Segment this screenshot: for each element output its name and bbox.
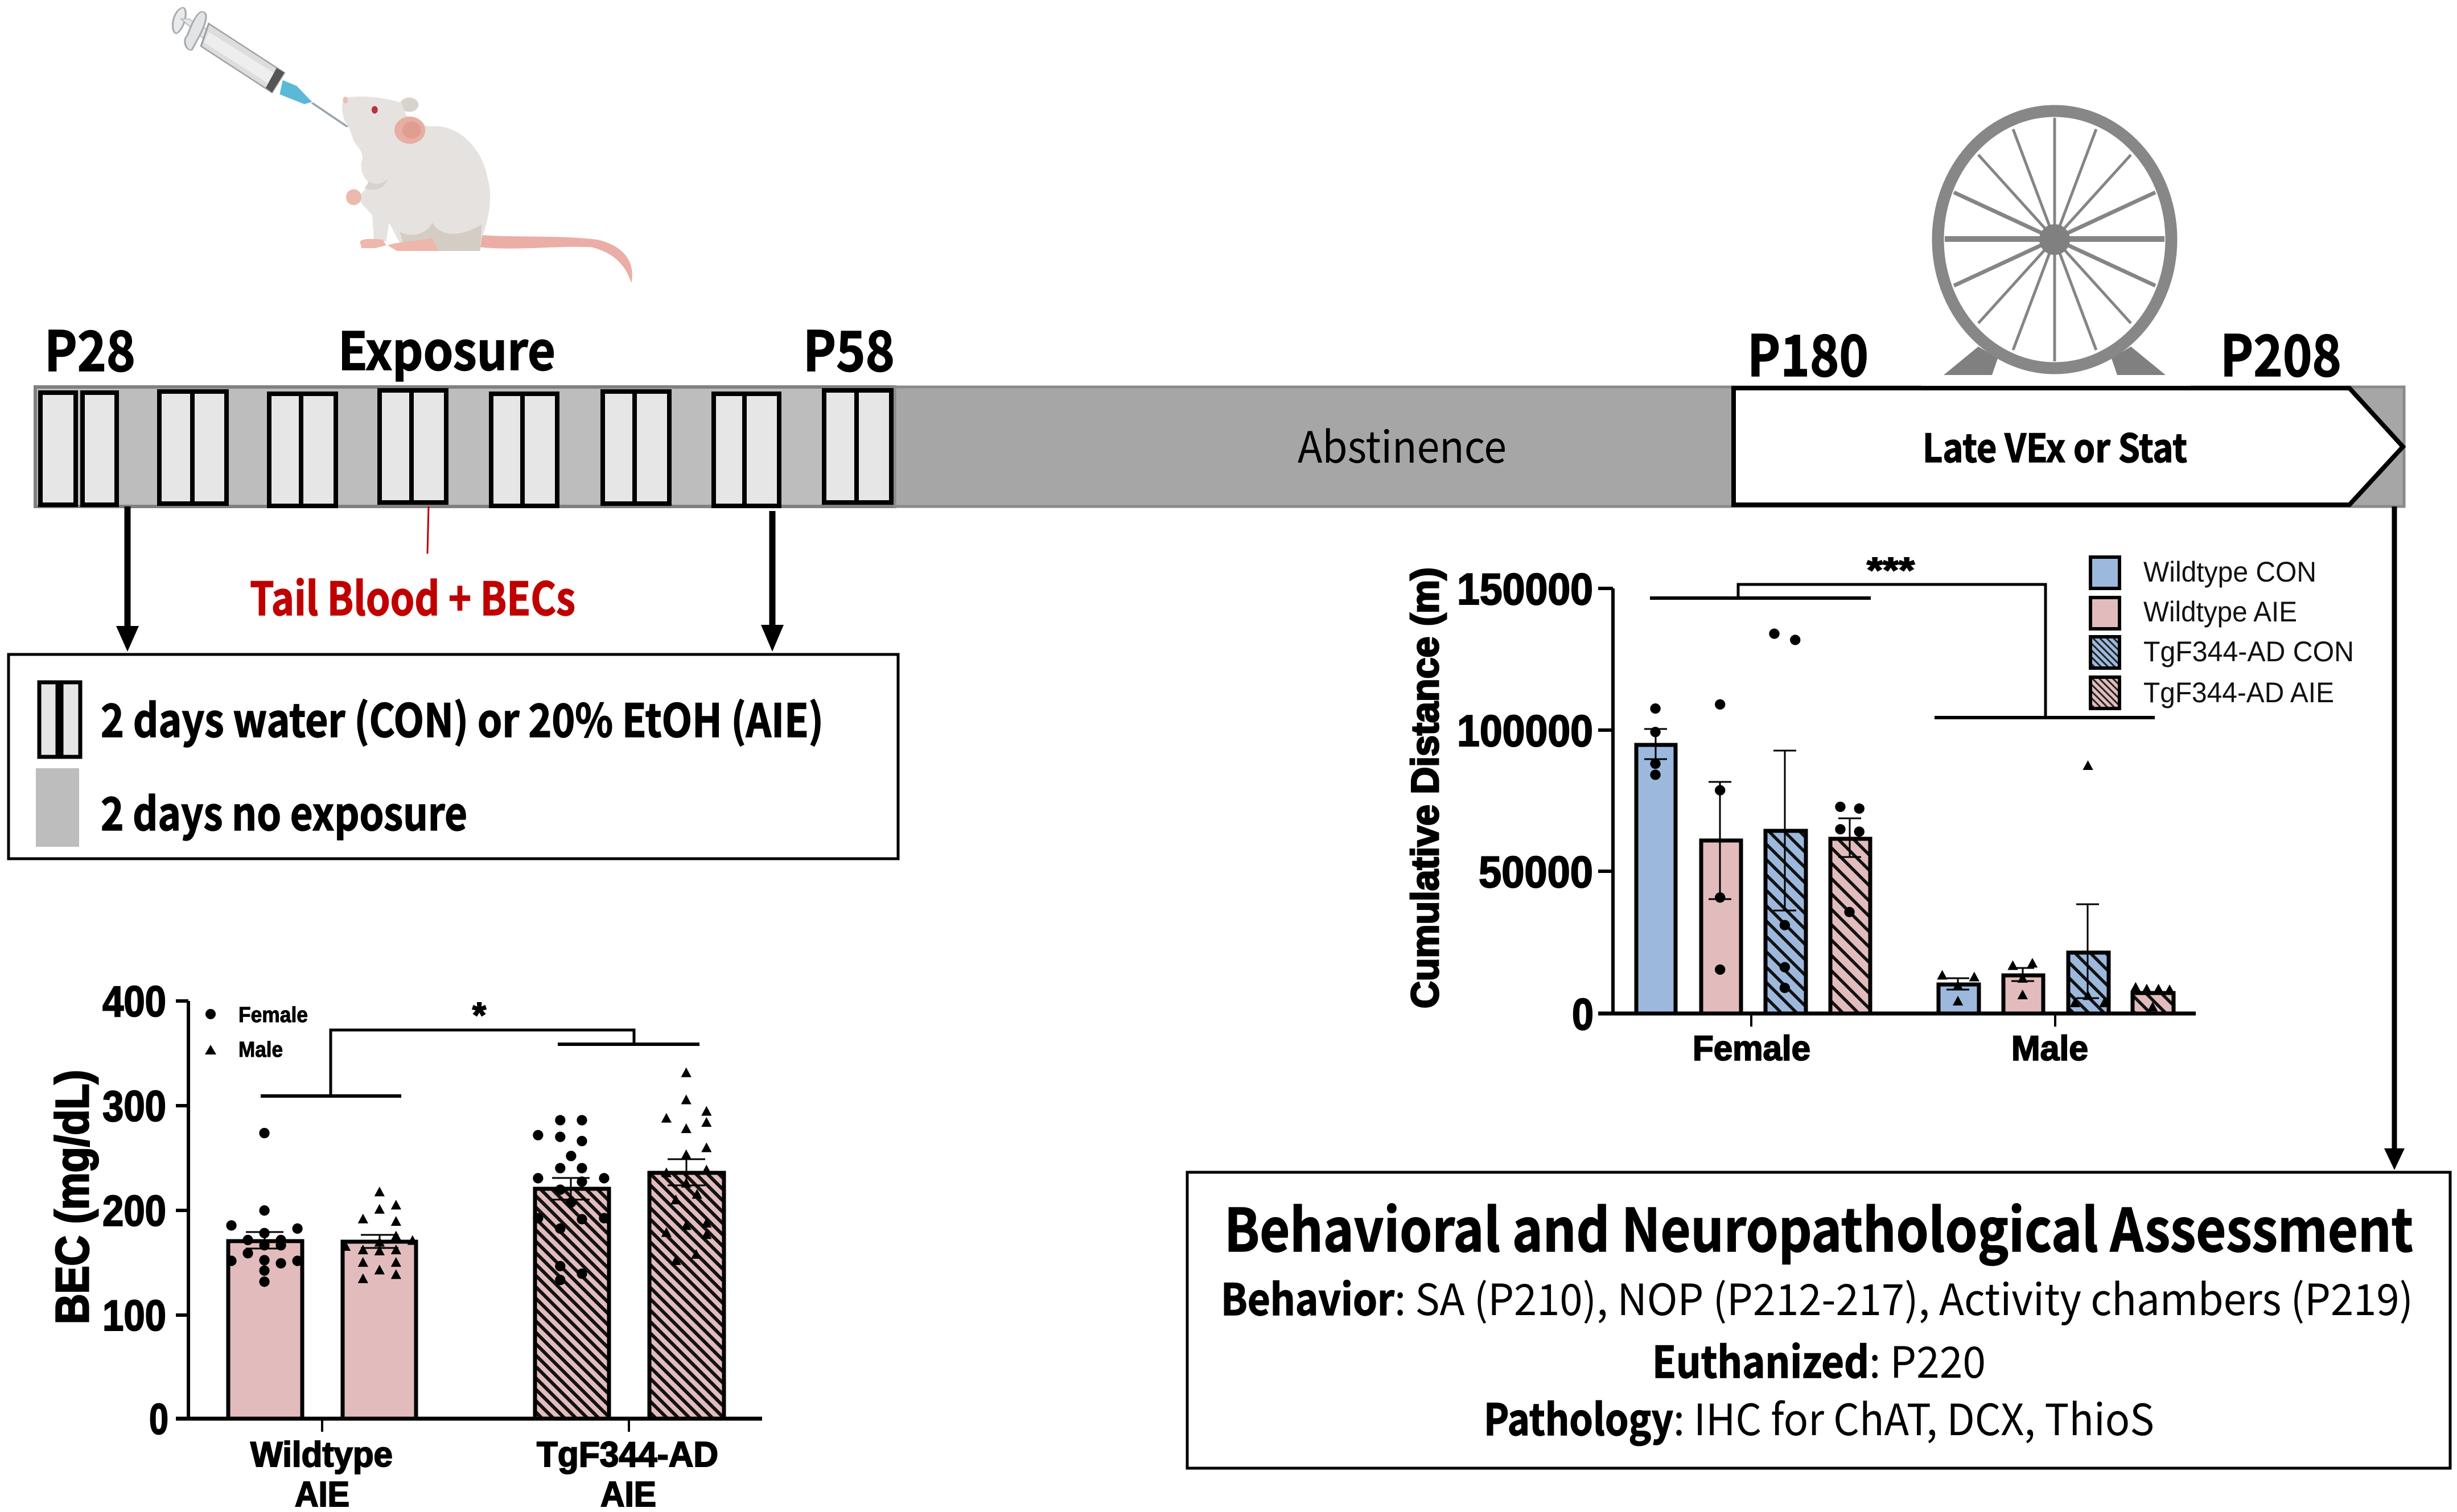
y tick labels: 0 xyxy=(149,1395,168,1444)
euthanized line: : P220 xyxy=(1869,1328,1986,1390)
text: exposure days: 2 days water (CON) or 20% EtOH (AIE) xyxy=(101,685,824,751)
y tick labels: 150000 xyxy=(1457,564,1593,614)
paw xyxy=(346,189,361,205)
behavior line: Behavior xyxy=(1221,1265,1395,1328)
exposure segment xyxy=(35,387,895,506)
x axis labels: Male xyxy=(2011,1029,2088,1068)
y axis title: Cumulative Distance (m) xyxy=(1404,567,1447,1008)
tail blood marker line xyxy=(427,506,429,554)
arrow: timeline to assessment xyxy=(2384,506,2405,1170)
body shading xyxy=(400,223,481,251)
x axis labels: Wildtype xyxy=(250,1435,393,1474)
pathology line: : IHC for ChAT, DCX, ThioS xyxy=(1673,1385,2154,1448)
euthanized line: Euthanized xyxy=(1652,1328,1869,1390)
pink ear xyxy=(394,117,425,144)
exposure day pairs xyxy=(40,390,891,506)
significance bracket: * xyxy=(472,996,487,1035)
panel: behavioral and neuropathological assessment xyxy=(1187,1172,2450,1468)
chart: BEC xyxy=(47,978,762,1512)
nose xyxy=(343,97,348,104)
data points xyxy=(226,1068,711,1287)
chart legend: Wildtype CON xyxy=(2143,556,2316,588)
axes xyxy=(1598,588,2196,1027)
y tick labels xyxy=(102,978,168,1444)
chart legend: TgF344-AD CON xyxy=(2143,636,2354,668)
chart: cumulative distance xyxy=(1404,551,2354,1068)
label: P58: P58 xyxy=(803,307,895,387)
sex legend: Female xyxy=(238,1003,308,1027)
y tick labels: 100000 xyxy=(1457,706,1593,756)
label: P180: P180 xyxy=(1747,310,1869,393)
data points xyxy=(1650,629,2175,1011)
sex legend xyxy=(205,1003,308,1062)
chart legend: TgF344-AD AIE xyxy=(2143,677,2334,708)
panel: exposure legend xyxy=(9,654,898,859)
y tick labels: 400 xyxy=(102,978,166,1026)
y tick labels: 300 xyxy=(102,1082,166,1131)
bars xyxy=(1636,745,2174,1014)
behavior line: : SA (P210), NOP (P212-217), Activity chambers (P219) xyxy=(1394,1265,2413,1328)
text: no exposure: 2 days no exposure xyxy=(101,778,467,844)
x axis labels xyxy=(250,1435,718,1512)
error bars xyxy=(1644,729,2099,998)
arrow: timeline to legend, right xyxy=(761,511,784,652)
icon: rat xyxy=(342,97,632,283)
x axis labels xyxy=(1693,1029,2088,1068)
icon: exposure days xyxy=(39,682,80,757)
y axis title: BEC (mg/dL) xyxy=(47,1070,98,1324)
label: tail blood and BECs: Tail Blood + BECs xyxy=(250,563,575,629)
tail xyxy=(480,235,632,283)
pathology line: Pathology xyxy=(1484,1385,1673,1448)
eye xyxy=(372,106,378,114)
label: Exposure: Exposure xyxy=(338,310,555,385)
significance bracket xyxy=(1650,551,2155,718)
timeline bar xyxy=(35,387,2404,506)
bars xyxy=(228,1173,724,1419)
significance bracket: *** xyxy=(1867,551,1915,590)
significance bracket xyxy=(261,996,699,1096)
label: P208: P208 xyxy=(2220,310,2341,393)
axes xyxy=(176,1001,762,1432)
label: Abstinence: Abstinence xyxy=(1298,413,1507,475)
sex legend: Male xyxy=(238,1038,283,1062)
label: Late VEx or Stat: Late VEx or Stat xyxy=(1923,417,2187,473)
icon: no exposure xyxy=(36,768,79,847)
y tick labels: 50000 xyxy=(1479,847,1593,897)
feet xyxy=(360,239,386,248)
y tick labels: 0 xyxy=(1572,989,1594,1039)
body xyxy=(342,97,490,251)
y tick labels: 200 xyxy=(102,1187,166,1235)
late VEx arrow xyxy=(1734,388,2403,505)
pathology line xyxy=(1484,1385,2154,1448)
icon: syringe xyxy=(172,7,348,127)
abstinence segment xyxy=(895,387,2404,506)
icon: running wheel xyxy=(1921,111,2191,386)
chart legend: Wildtype AIE xyxy=(2143,596,2297,628)
error bars xyxy=(246,1159,705,1249)
x axis labels: TgF344-AD xyxy=(537,1435,718,1474)
x axis labels: Female xyxy=(1693,1029,1810,1068)
arrow: timeline to legend, left xyxy=(116,506,139,652)
y tick labels: 100 xyxy=(102,1292,166,1340)
back ear xyxy=(400,97,418,112)
label: P28: P28 xyxy=(44,307,135,387)
chart legend xyxy=(2090,556,2354,708)
y tick labels xyxy=(1457,564,1594,1039)
